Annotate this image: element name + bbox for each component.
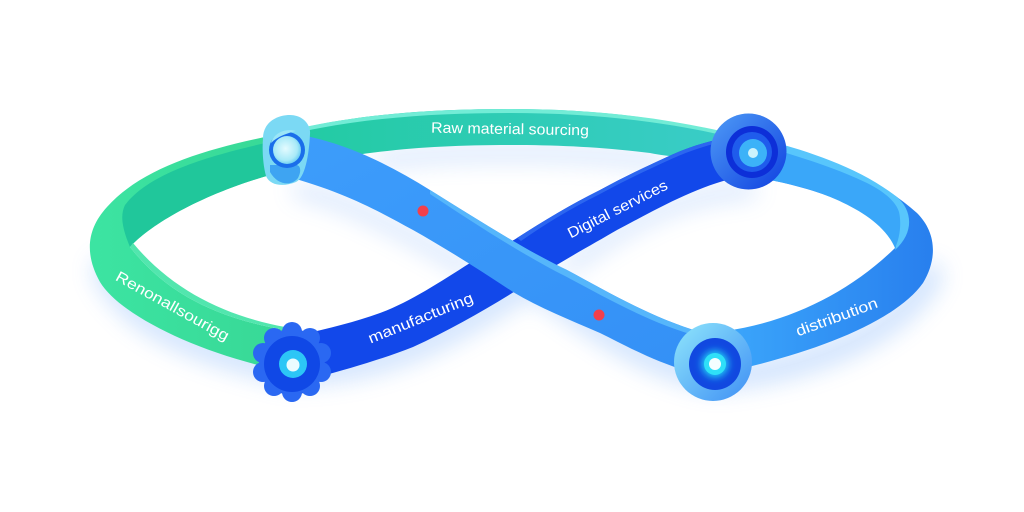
green ribbon: left arc xyxy=(90,136,285,366)
label: Digital services: Digital services xyxy=(565,177,671,242)
node: bottom right glowing disc xyxy=(674,323,752,401)
label: distribution: distribution xyxy=(794,295,880,340)
node: top right concentric disc xyxy=(710,114,786,190)
red dot: upper crossing band xyxy=(418,206,428,216)
dark blue ribbon: manufacturing to digital services xyxy=(300,138,735,378)
soft drop shadow under loop xyxy=(105,153,930,378)
label: manufacturing: manufacturing xyxy=(366,290,476,347)
node: bottom left flower gear xyxy=(253,322,331,402)
label: Raw material sourcing: Raw material sourcing xyxy=(431,120,589,139)
blue ribbon: right arc xyxy=(725,141,933,370)
red dot: lower crossing band xyxy=(594,310,604,320)
green ribbon: top arc xyxy=(285,109,730,178)
node: top left pale ball xyxy=(263,115,310,185)
light blue ribbon: crossing band xyxy=(285,134,700,372)
label: Renonallsourigg: Renonallsourigg xyxy=(113,268,232,345)
